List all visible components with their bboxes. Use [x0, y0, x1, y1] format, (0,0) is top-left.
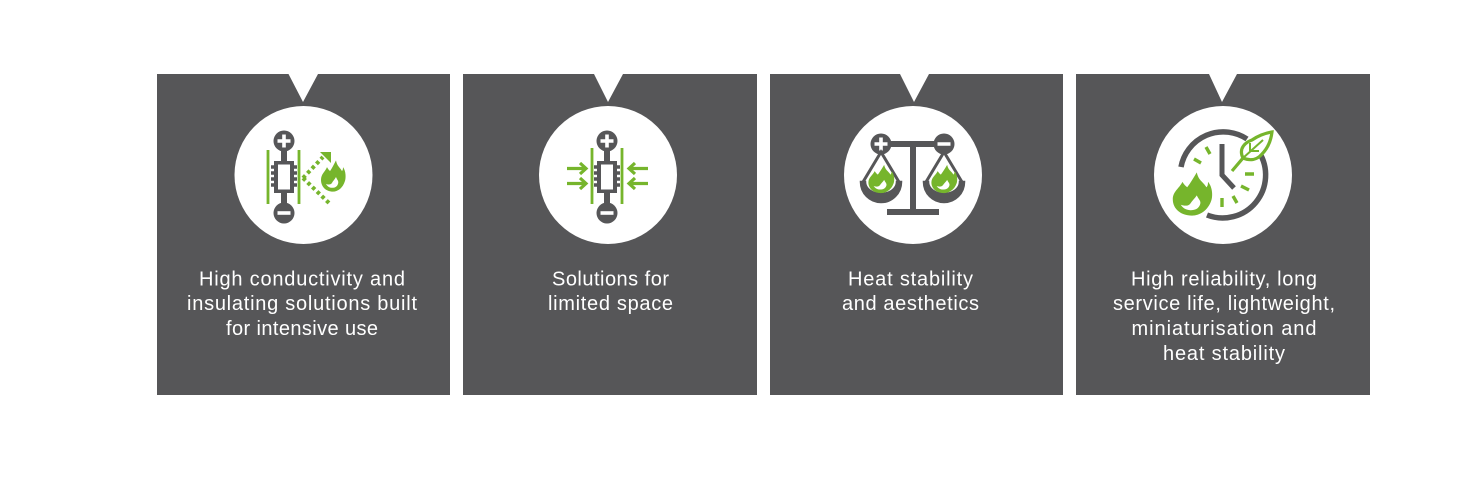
text: heat stability caption: and aesthetics [842, 293, 979, 315]
text: heat stability caption: Heat stability [848, 268, 973, 290]
icon: feather [1232, 132, 1272, 171]
text: high reliability caption: heat stability [1163, 343, 1285, 365]
text: high reliability caption: miniaturisation and [1132, 318, 1316, 340]
text: high reliability caption: High reliability, long [1131, 268, 1317, 290]
icon: clock with feather and flame [1154, 106, 1292, 244]
panel: limited space [463, 74, 757, 395]
icon: chip compressed by arrows [539, 106, 677, 244]
text: limited space caption: limited space [548, 293, 673, 315]
text: high conductivity caption: for intensive use [226, 318, 378, 340]
icon: chip with heat deflected [234, 106, 372, 244]
text: high conductivity caption: insulating solutions built [187, 293, 417, 315]
panel: high conductivity [157, 74, 450, 395]
panel: heat stability [770, 74, 1063, 395]
text: high conductivity caption [187, 268, 417, 340]
text: limited space caption [548, 268, 673, 315]
panel: high reliability [1076, 74, 1370, 395]
text: high reliability caption [1113, 268, 1335, 365]
text: heat stability caption [842, 268, 979, 315]
icon: balance scale with flames [844, 106, 982, 244]
text: high reliability caption: service life, lightweight, [1113, 293, 1335, 315]
text: high conductivity caption: High conductivity and [199, 268, 405, 290]
text: limited space caption: Solutions for [552, 268, 669, 290]
